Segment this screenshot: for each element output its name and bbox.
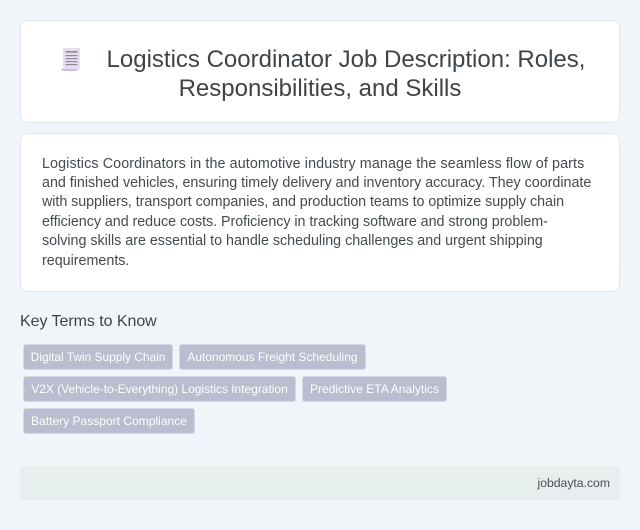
- icon: document scroll: [61, 48, 80, 71]
- heading: title: Responsibilities, and Skills: [179, 74, 461, 102]
- text block: description: with suppliers, transport companies, and production teams to optimize supply chain: [42, 194, 564, 210]
- text block: description: [42, 156, 591, 269]
- text block: description: solving skills are essential to handle scheduling challenges and urgent shipping: [42, 233, 543, 249]
- text block: description: and finished vehicles, ensuring timely delivery and inventory accuracy. They coordinate: [42, 175, 591, 191]
- tag: [302, 376, 447, 402]
- tag: Battery Passport Compliance: [31, 414, 187, 428]
- footer bar: [20, 466, 620, 500]
- text block: description: Logistics Coordinators in the automotive industry manage the seamless flow of parts: [42, 156, 584, 172]
- heading: key terms: Key Terms to Know: [20, 313, 157, 330]
- footer text: jobdayta.com: [538, 476, 610, 490]
- tag: Digital Twin Supply Chain: [31, 350, 165, 364]
- tag list: key terms: [23, 344, 447, 434]
- heading: title: [107, 46, 585, 102]
- tag: [23, 344, 173, 370]
- heading: title: Logistics Coordinator Job Description: Roles,: [107, 46, 585, 72]
- text block: description: requirements.: [42, 253, 129, 269]
- tag: [23, 408, 195, 434]
- tag: V2X (Vehicle-to-Everything) Logistics Integration: [31, 382, 288, 396]
- tag: Autonomous Freight Scheduling: [187, 350, 358, 364]
- panel: title card: [20, 20, 620, 123]
- tag: [179, 344, 366, 370]
- tag: [23, 376, 296, 402]
- tag: Predictive ETA Analytics: [310, 382, 439, 396]
- panel: description: [20, 133, 620, 292]
- text block: description: efficiency and reduce costs. Proficiency in tracking software and strong problem-: [42, 214, 548, 230]
